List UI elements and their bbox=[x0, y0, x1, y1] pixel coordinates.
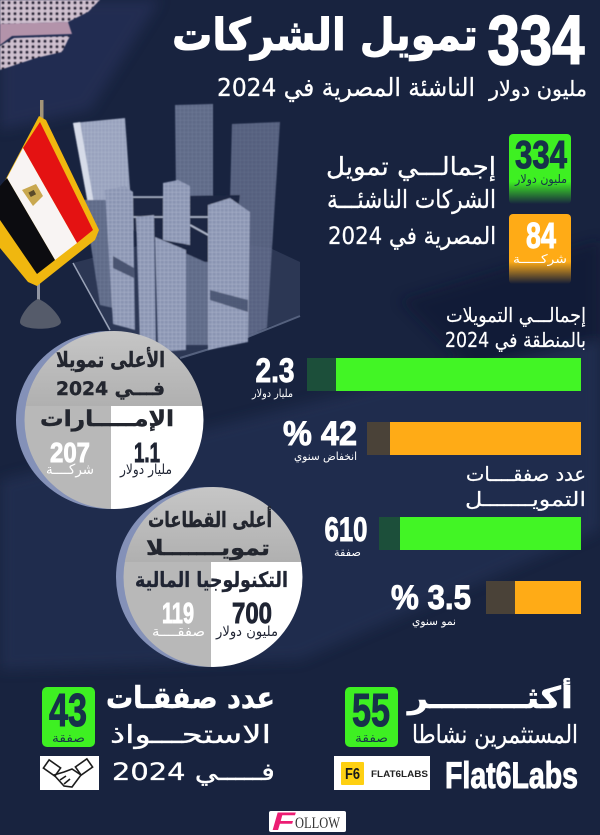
panel: acquisition deals bbox=[40, 681, 275, 790]
subheading: المستثمرين نشاطا bbox=[412, 720, 578, 749]
stat box: 55 deals: صفقة bbox=[355, 731, 388, 745]
value: 207 companies: 207 bbox=[50, 437, 90, 468]
summary text: إجمالـــي تمويل bbox=[326, 152, 496, 182]
logo: Flat6Labs: FLAT6LABS bbox=[371, 769, 428, 779]
flag of Egypt on stand bbox=[0, 100, 99, 329]
logo: Follow bbox=[269, 808, 346, 835]
section heading: regional funding: بالمنطقة في 2024 bbox=[445, 328, 586, 353]
ground plane under towers bbox=[73, 235, 300, 358]
stat box: 43 deals bbox=[42, 684, 95, 747]
section heading: number of deals: التمويـــــــل bbox=[465, 487, 586, 511]
bar: 2.3 billion dollars: مليار دولار bbox=[251, 387, 293, 400]
flag pole bbox=[40, 100, 44, 120]
circle: top funded country: شركــــة bbox=[46, 462, 94, 478]
stat box: 55 deals bbox=[345, 684, 398, 747]
bar: 2.3 billion dollars bbox=[251, 352, 581, 400]
summary text: الشركات الناشئـــة bbox=[327, 185, 496, 214]
section heading: regional funding: إجمالـــي التمويلات bbox=[446, 303, 586, 328]
logo: Follow: OLLOW bbox=[295, 815, 341, 832]
red stripe bbox=[23, 122, 93, 243]
section heading: regional funding bbox=[445, 303, 586, 353]
back tower left bbox=[73, 118, 131, 308]
circle: top funded country bbox=[16, 330, 210, 510]
value: 700 million: 700 bbox=[232, 598, 272, 630]
stat box: 334 bbox=[509, 134, 571, 204]
city towers illustration bbox=[73, 104, 280, 352]
flag stand bbox=[20, 283, 61, 329]
panel: most active investor bbox=[334, 678, 578, 796]
circle heading: أعلى القطاعات bbox=[148, 505, 272, 532]
logo: Flat6Labs: F6 bbox=[345, 766, 360, 783]
bar: 42% annual decline bbox=[283, 415, 581, 463]
logo: Flat6Labs bbox=[334, 756, 430, 790]
value: 119 deals: 119 bbox=[162, 598, 194, 630]
bar: 3.5% annual growth: % 3.5 bbox=[391, 579, 471, 617]
circle: top funded sector: مليون دولار bbox=[215, 624, 278, 640]
value: 1.1 billion: 1.1 bbox=[134, 437, 160, 468]
stat box: 334: مليون دولار bbox=[514, 172, 567, 187]
metal grille decoration bbox=[0, 0, 100, 70]
stat box: 84: 84 bbox=[526, 215, 556, 256]
summary text: المصرية في 2024 bbox=[328, 222, 496, 250]
summary block bbox=[326, 134, 571, 284]
stat box: 84 bbox=[509, 214, 571, 284]
stat box: 55 deals: 55 bbox=[352, 684, 390, 736]
circle: top funded country: مليار دولار bbox=[119, 462, 172, 478]
back tower centre bbox=[175, 104, 213, 345]
subtitle unit: مليون دولار bbox=[488, 77, 587, 101]
circle: top funded sector: تمويـــــــلا bbox=[146, 536, 270, 560]
connecting plaza bbox=[130, 195, 240, 262]
bar: 2.3 billion dollars: 2.3 bbox=[256, 352, 294, 390]
flag fringe bbox=[0, 116, 99, 286]
back tower right bbox=[230, 122, 280, 338]
stat box: 334: 334 bbox=[515, 134, 567, 177]
white stripe bbox=[7, 148, 77, 260]
bar: 610 deals: 610 bbox=[324, 511, 368, 549]
black stripe bbox=[0, 178, 55, 274]
bar: 610 deals bbox=[324, 511, 581, 559]
section heading: number of deals bbox=[465, 462, 586, 511]
sector: التكنولوجيا المالية bbox=[135, 568, 288, 592]
bar: 42% annual decline: % 42 bbox=[283, 415, 357, 453]
bar: 3.5% annual growth bbox=[391, 579, 581, 628]
icon: handshake bbox=[40, 756, 99, 790]
year line: فـــــي 2024 bbox=[112, 758, 275, 786]
stat box: 43 deals: صفقة bbox=[52, 731, 85, 745]
circle: top funded sector: صفقــــة bbox=[152, 624, 205, 640]
eagle emblem bbox=[22, 184, 43, 206]
circle heading: الأعلى تمويلا bbox=[56, 346, 165, 372]
country: الإمـــــارات bbox=[40, 407, 174, 432]
subtitle: الناشئة المصرية في 2024 bbox=[217, 73, 475, 102]
title text: تمويل الشركات bbox=[172, 10, 478, 61]
subheading: الاستحـــواذ bbox=[110, 720, 271, 749]
stat box: 84: شركـــــة bbox=[513, 252, 567, 267]
circle: top funded sector bbox=[116, 487, 310, 668]
summary text bbox=[326, 152, 496, 250]
heading: أكثــــــــر bbox=[406, 678, 573, 716]
stat box: 43 deals: 43 bbox=[49, 684, 87, 736]
front towers bbox=[105, 186, 135, 330]
title bbox=[172, 1, 587, 102]
circle: top funded country: فـــي 2024 bbox=[56, 378, 165, 400]
bar: 610 deals: صفقة bbox=[334, 546, 361, 559]
section heading: number of deals: عدد صفقــــات bbox=[466, 462, 586, 486]
bar: 42% annual decline: انخفاض سنوي bbox=[294, 450, 357, 463]
heading: عدد صفقـات bbox=[106, 681, 275, 716]
bar: 3.5% annual growth: نمو سنوي bbox=[412, 615, 456, 628]
